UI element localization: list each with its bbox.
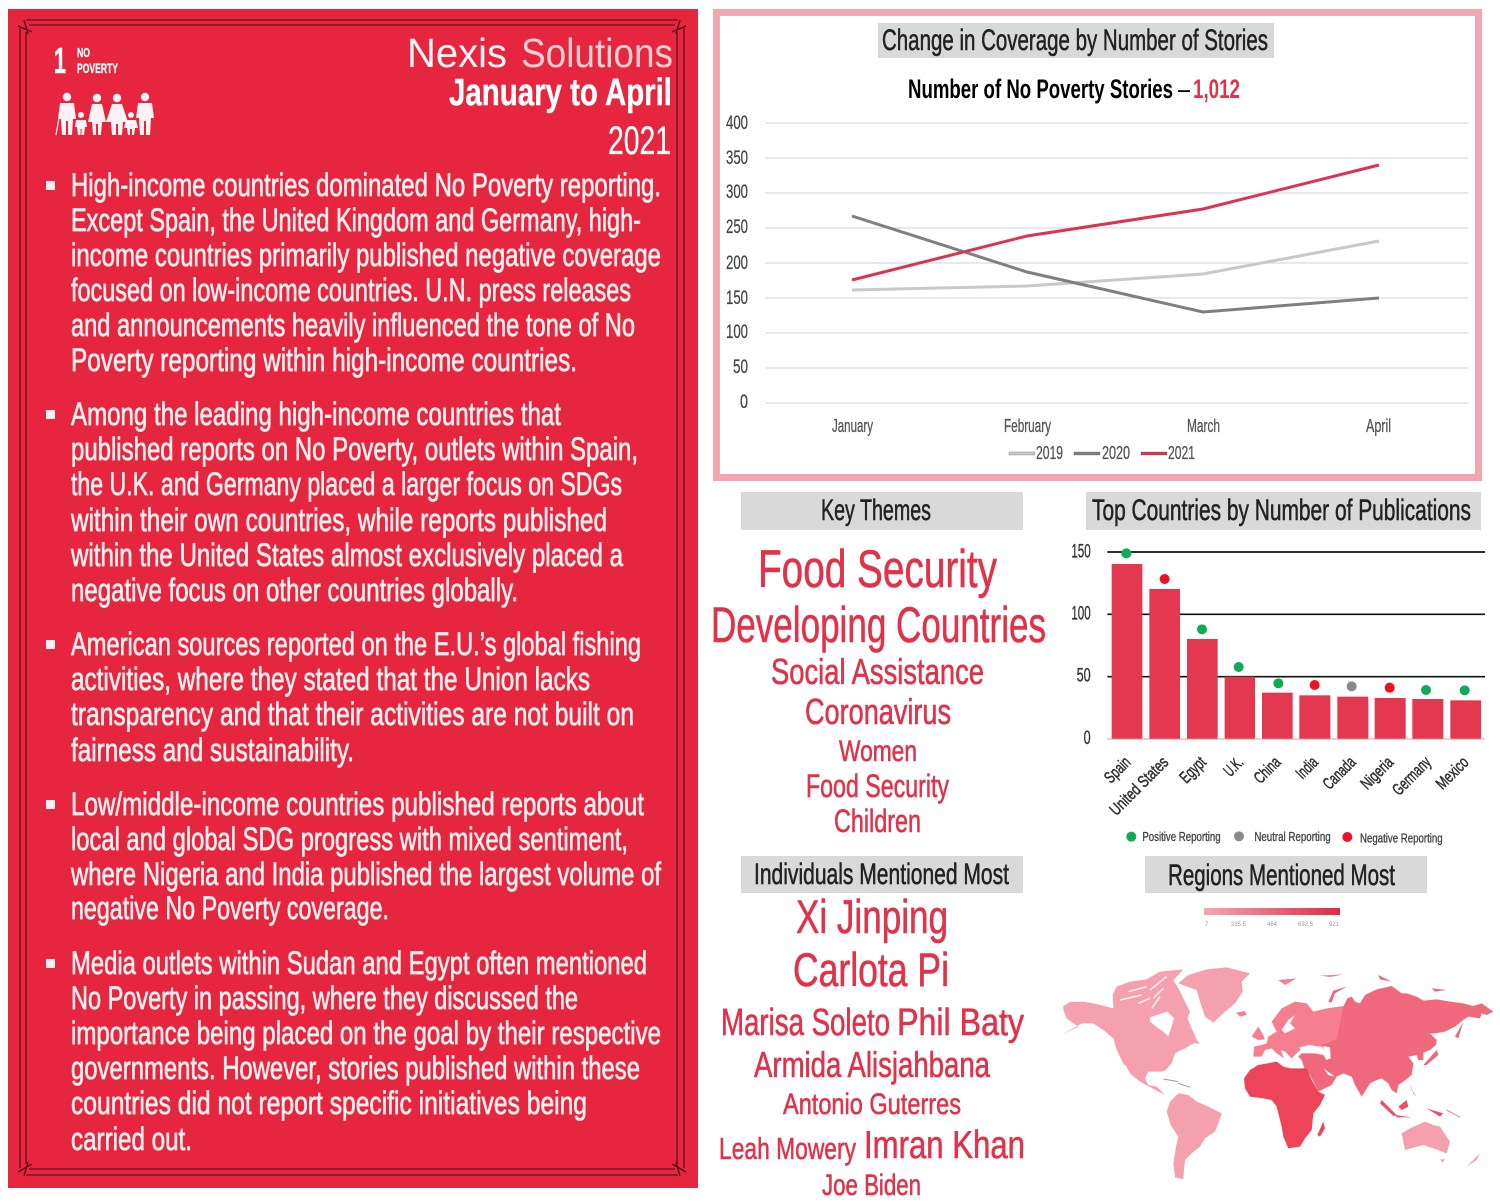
bar chart: top countries: China [1250, 752, 1285, 787]
text block: bullet 2: the U.K. and Germany placed a larger focus on SDGs [71, 466, 622, 502]
text block: bullet 2: published reports on No Poverty, outlets within Spain, [71, 431, 638, 467]
text block: bullet 2: within the United States almost exclusively placed a [70, 537, 623, 573]
heading: individuals mentioned most [741, 856, 1023, 893]
word cloud: key themes: Developing Countries [711, 597, 1046, 653]
SDG label: 1 No Poverty: 1 [54, 40, 66, 81]
heading: change in coverage [878, 23, 1274, 58]
line chart: January [832, 416, 873, 436]
text block: bullet 3: transparency and that their activities are not built on [71, 696, 634, 732]
line chart: April [1366, 416, 1391, 436]
text block: bullet 1: and announcements heavily influenced the tone of No [71, 307, 635, 343]
subheading: number of stories: Number of No Poverty Stories [908, 74, 1173, 104]
subheading: number of stories: – [1178, 74, 1190, 104]
map: Oceania [1402, 1122, 1480, 1167]
text block: bullet 5: governments. However, stories published within these [71, 1050, 640, 1086]
word cloud: key themes: Food Security [758, 540, 997, 599]
text block: bullet 4 [46, 786, 661, 926]
panel: red summary panel [8, 9, 698, 1188]
SDG label: 1 No Poverty: POVERTY [77, 60, 118, 76]
map: Asia [1298, 975, 1493, 1097]
bar chart: top countries: Mexico [1432, 753, 1472, 793]
SDG label: 1 No Poverty: NO [77, 45, 90, 60]
chart legend [1009, 443, 1195, 463]
text block: bullet 2: Among the leading high-income countries that [71, 396, 561, 432]
bar chart legend: Neutral Reporting [1254, 830, 1331, 844]
heading: date range: January to April [449, 72, 672, 114]
map: South America [1167, 1093, 1222, 1179]
panel: change in coverage [716, 12, 1478, 478]
bar chart: top countries [1071, 541, 1485, 845]
word cloud: key themes: Social Assistance [771, 651, 984, 692]
line chart: 200 [726, 253, 748, 274]
SDG label: 1 No Poverty [54, 40, 118, 81]
bar chart: top countries: 150 [1071, 541, 1091, 562]
bar chart: top countries: 50 [1077, 666, 1091, 687]
word cloud: individuals: Xi Jinping [796, 890, 948, 943]
map: North America [1062, 967, 1250, 1097]
line chart: 50 [733, 357, 748, 378]
word cloud: individuals: Leah Mowery [719, 1131, 856, 1166]
map legend: 692.5 [1298, 922, 1314, 928]
text block: bullet 1: income countries primarily published negative coverage [71, 237, 661, 273]
heading: regions mentioned most: Regions Mentioned Most [1168, 859, 1395, 892]
world map [1062, 967, 1493, 1179]
text block: bullet 1 [46, 167, 661, 378]
text block: bullet 2 [46, 396, 638, 608]
bar chart: top countries: Egypt [1176, 753, 1210, 787]
bar chart: top countries: United States [1106, 753, 1172, 819]
word cloud: individuals: Joe Biden [822, 1169, 921, 1202]
heading: regions mentioned most [1145, 856, 1427, 893]
word cloud: individuals: Imran Khan [864, 1124, 1025, 1167]
map: Southeast Asia [1380, 1083, 1460, 1117]
bar chart legend [1126, 830, 1443, 845]
text block: bullet 5: importance being placed on the goal by their respective [71, 1015, 661, 1051]
word cloud: individuals: Phil Baty [897, 1002, 1024, 1044]
heading: key themes [741, 492, 1023, 530]
heading: change in coverage: Change in Coverage by Number of Stories [882, 24, 1268, 57]
bar chart: top countries: Nigeria [1357, 752, 1398, 793]
line chart: 300 [726, 182, 748, 203]
word cloud: individuals: Carlota Pi [793, 943, 949, 996]
bar chart: top countries: Spain [1100, 753, 1134, 787]
bar chart: top countries: U.K. [1220, 753, 1247, 780]
chart legend: 2021 [1168, 443, 1195, 463]
line chart: 150 [726, 288, 748, 309]
heading: date range: 2021 [608, 119, 671, 163]
word cloud: key themes: Children [834, 803, 921, 839]
map: Africa [1244, 1062, 1325, 1148]
word cloud: key themes: Women [839, 735, 917, 768]
chart legend: 2020 [1102, 443, 1130, 463]
text block: bullet 3 [46, 626, 641, 768]
text block: bullet 2: within their own countries, while reports published [70, 502, 607, 538]
text block: bullet 1: Poverty reporting within high-income countries. [71, 342, 577, 378]
brand: Nexis Solutions: Nexis [407, 30, 507, 76]
subheading: number of stories: 1,012 [1193, 74, 1240, 104]
brand: Nexis Solutions [407, 30, 673, 76]
line chart: 400 [726, 113, 748, 134]
word cloud: key themes: Food Security [806, 768, 949, 804]
text block: bullet 5: No Poverty in passing, where they discussed the [71, 980, 578, 1016]
line chart: February [1004, 416, 1051, 436]
text block: bullet 3: activities, where they stated that the Union lacks [71, 661, 590, 697]
heading: date range [449, 72, 672, 163]
bar chart legend: Positive Reporting [1142, 830, 1221, 844]
line chart: 100 [726, 322, 748, 343]
text block: bullet 1: Except Spain, the United Kingdom and Germany, high- [71, 202, 641, 238]
map legend: 464 [1267, 922, 1278, 928]
heading: key themes: Key Themes [821, 494, 931, 527]
chart legend: 2019 [1036, 443, 1063, 463]
map: Europe [1236, 974, 1344, 1058]
text block: bullet 4: where Nigeria and India published the largest volume of [70, 856, 661, 892]
line chart: 250 [726, 217, 748, 238]
text block: bullet 1: High-income countries dominated No Poverty reporting. [71, 167, 661, 203]
bar chart: top countries: Germany [1388, 752, 1435, 799]
text block: bullet 5: carried out. [71, 1121, 192, 1157]
map legend: 235.5 [1231, 922, 1247, 928]
word cloud: individuals: Armida Alisjahbana [754, 1044, 991, 1085]
word cloud: individuals [719, 890, 1025, 1202]
text block: bullet 5 [46, 945, 661, 1157]
map legend [1204, 908, 1340, 928]
text block: bullet 1: focused on low-income countries. U.N. press releases [71, 272, 631, 308]
word cloud: individuals: Antonio Guterres [783, 1088, 961, 1121]
bar chart: top countries: 0 [1084, 728, 1091, 749]
bar chart: top countries: Canada [1319, 752, 1360, 793]
text block: bullet 4: Low/middle-income countries published reports about [71, 786, 644, 822]
map legend: 7 [1205, 922, 1209, 928]
bar chart legend: Negative Reporting [1360, 831, 1443, 845]
icon: family of six [56, 93, 154, 135]
line chart: March [1187, 416, 1220, 436]
heading: individuals mentioned most: Individuals Mentioned Most [754, 858, 1009, 891]
text block: bullet 4: negative No Poverty coverage. [71, 890, 389, 926]
bar chart: top countries: India [1292, 752, 1322, 783]
text block: bullet 5: countries did not report specific initiatives being [71, 1085, 587, 1121]
line chart: 0 [740, 392, 748, 413]
text block: bullet 4: local and global SDG progress with mixed sentiment, [71, 821, 628, 857]
text block: bullet 3: fairness and sustainability. [71, 732, 354, 768]
brand: Nexis Solutions: Solutions [521, 30, 673, 76]
text block: bullet 2: negative focus on other countries globally. [71, 572, 518, 608]
word cloud: key themes: Coronavirus [805, 691, 951, 732]
bar chart: top countries: 100 [1071, 603, 1091, 624]
line chart [726, 113, 1468, 463]
text block: bullet 3: American sources reported on the E.U.’s global fishing [71, 626, 641, 662]
word cloud: key themes [711, 540, 1046, 839]
line chart: 350 [726, 148, 748, 169]
map legend: 921 [1329, 922, 1340, 928]
word cloud: individuals: Marisa Soleto [721, 1002, 890, 1044]
text block: bullet 5: Media outlets within Sudan and Egypt often mentioned [71, 945, 647, 981]
